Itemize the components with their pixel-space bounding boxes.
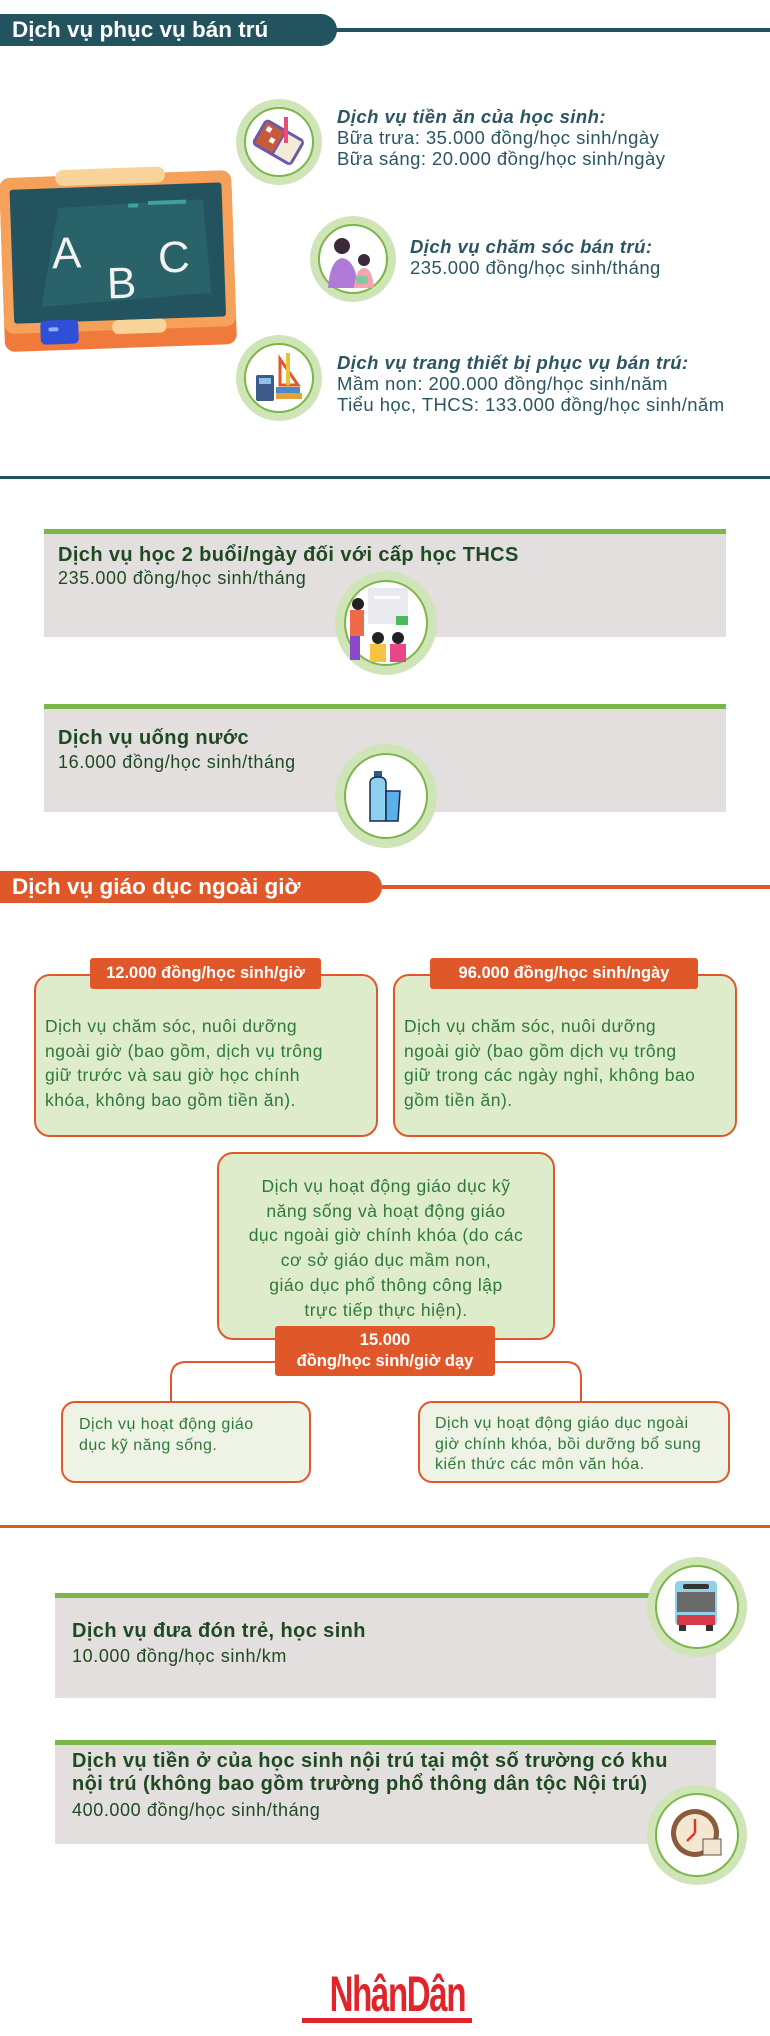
panel: tiền ở nội trú: Dịch vụ tiền ở của học sinh nội trú tại một số trường có khu bbox=[72, 1750, 668, 1772]
box: 12.000 đồng/giờ bbox=[34, 958, 378, 1137]
box: kỹ năng sống center: dục ngoài giờ chính khóa (do các bbox=[249, 1225, 523, 1245]
tag: 15.000: 15.000 bbox=[360, 1331, 410, 1349]
panel: uống nước bbox=[44, 704, 726, 848]
text: tiền ăn bbox=[337, 106, 665, 169]
panel: học 2 buổi bbox=[44, 529, 726, 675]
header: Dịch vụ phục vụ bán trú: Dịch vụ phục vụ bán trú bbox=[12, 17, 268, 42]
header: Dịch vụ phục vụ bán trú bbox=[0, 14, 770, 46]
box: 12.000 đồng/giờ: khóa, không bao gồm tiền ăn). bbox=[45, 1090, 296, 1110]
box: kỹ năng sống center: Dịch vụ hoạt động giáo dục kỹ bbox=[262, 1176, 510, 1196]
text: chăm sóc bán trú: Dịch vụ chăm sóc bán trú: bbox=[410, 236, 653, 257]
panel: tiền ở nội trú: nội trú (không bao gồm trường phổ thông dân tộc Nội trú) bbox=[72, 1773, 647, 1795]
connectors bbox=[170, 1361, 582, 1401]
panel: học 2 buổi: 235.000 đồng/học sinh/tháng bbox=[58, 568, 306, 588]
icon: mother feeding child bbox=[310, 216, 396, 302]
text: trang thiết bị: Tiểu học, THCS: 133.000 đồng/học sinh/năm bbox=[337, 394, 725, 415]
box: kỹ năng sống bbox=[61, 1401, 311, 1483]
header: Dịch vụ giáo dục ngoài giờ: Dịch vụ giáo dục ngoài giờ bbox=[12, 874, 301, 899]
icon: bus bbox=[647, 1557, 747, 1657]
icon: lunch box bbox=[236, 99, 322, 185]
icon: clock and book bbox=[647, 1785, 747, 1885]
box: kỹ năng sống center: giáo dục phổ thông công lập bbox=[269, 1275, 503, 1295]
text: chăm sóc bán trú: 235.000 đồng/học sinh/tháng bbox=[410, 257, 661, 278]
icon: classroom bbox=[335, 571, 437, 675]
text: chăm sóc bán trú bbox=[410, 236, 661, 278]
box: 96.000 đồng/ngày: 96.000 đồng/học sinh/ngày bbox=[459, 964, 669, 982]
box: bồi dưỡng văn hóa bbox=[418, 1401, 730, 1483]
panel: đưa đón: Dịch vụ đưa đón trẻ, học sinh bbox=[72, 1620, 366, 1642]
box: 12.000 đồng/giờ: giữ trước và sau giờ học chính bbox=[45, 1065, 300, 1085]
logo: Nhân Dân: NhânDân bbox=[330, 1966, 465, 2022]
box: bồi dưỡng văn hóa: Dịch vụ hoạt động giáo dục ngoài bbox=[435, 1415, 689, 1432]
text: trang thiết bị: Dịch vụ trang thiết bị phục vụ bán trú: bbox=[337, 352, 689, 373]
chalkboard illustration: A bbox=[51, 228, 83, 278]
panel: tiền ở nội trú: 400.000 đồng/học sinh/tháng bbox=[72, 1800, 320, 1820]
box: 96.000 đồng/ngày: giữ trong các ngày nghỉ, không bao bbox=[404, 1065, 695, 1085]
box: 96.000 đồng/ngày: gồm tiền ăn). bbox=[404, 1090, 513, 1110]
header: Dịch vụ giáo dục ngoài giờ bbox=[0, 871, 770, 903]
text: trang thiết bị bbox=[337, 352, 725, 415]
box: 12.000 đồng/giờ: ngoài giờ (bao gồm, dịch vụ trông bbox=[45, 1040, 323, 1060]
box: kỹ năng sống: Dịch vụ hoạt động giáo bbox=[79, 1416, 254, 1433]
box: 96.000 đồng/ngày: ngoài giờ (bao gồm dịch vụ trông bbox=[404, 1040, 677, 1060]
tag: 15.000 bbox=[275, 1326, 495, 1376]
icon: water bottle bbox=[335, 744, 437, 848]
box: bồi dưỡng văn hóa: kiến thức các môn văn hóa. bbox=[435, 1456, 645, 1473]
box: kỹ năng sống center: trực tiếp thực hiện). bbox=[304, 1300, 468, 1320]
text: tiền ăn: Dịch vụ tiền ăn của học sinh: bbox=[337, 106, 606, 127]
box: kỹ năng sống center: cơ sở giáo dục mầm non, bbox=[281, 1250, 491, 1270]
panel: đưa đón: 10.000 đồng/học sinh/km bbox=[72, 1646, 287, 1666]
chalkboard illustration: C bbox=[157, 233, 191, 283]
box: 96.000 đồng/ngày: Dịch vụ chăm sóc, nuôi dưỡng bbox=[404, 1016, 656, 1036]
text: tiền ăn: Bữa sáng: 20.000 đồng/học sinh/ngày bbox=[337, 148, 665, 169]
text: trang thiết bị: Mầm non: 200.000 đồng/học sinh/năm bbox=[337, 373, 668, 394]
chalkboard illustration: B bbox=[106, 258, 137, 308]
icon: equipment bbox=[236, 335, 322, 421]
tag: 15.000: đồng/học sinh/giờ dạy bbox=[297, 1352, 473, 1370]
chalkboard illustration bbox=[0, 166, 237, 352]
box: kỹ năng sống: dục kỹ năng sống. bbox=[79, 1437, 217, 1454]
box: kỹ năng sống center bbox=[217, 1152, 555, 1376]
panel: uống nước: Dịch vụ uống nước bbox=[58, 727, 249, 749]
text: tiền ăn: Bữa trưa: 35.000 đồng/học sinh/ngày bbox=[337, 127, 659, 148]
box: 12.000 đồng/giờ: Dịch vụ chăm sóc, nuôi dưỡng bbox=[45, 1016, 297, 1036]
box: kỹ năng sống center: năng sống và hoạt động giáo bbox=[266, 1201, 506, 1221]
panel: học 2 buổi: Dịch vụ học 2 buổi/ngày đối với cấp học THCS bbox=[58, 544, 519, 566]
panel: uống nước: 16.000 đồng/học sinh/tháng bbox=[58, 752, 296, 772]
box: 12.000 đồng/giờ: 12.000 đồng/học sinh/giờ bbox=[106, 964, 305, 982]
panel: đưa đón bbox=[55, 1557, 747, 1698]
box: bồi dưỡng văn hóa: giờ chính khóa, bồi dưỡng bổ sung bbox=[435, 1436, 701, 1452]
box: 96.000 đồng/ngày bbox=[393, 958, 737, 1137]
panel: tiền ở nội trú bbox=[55, 1740, 747, 1885]
